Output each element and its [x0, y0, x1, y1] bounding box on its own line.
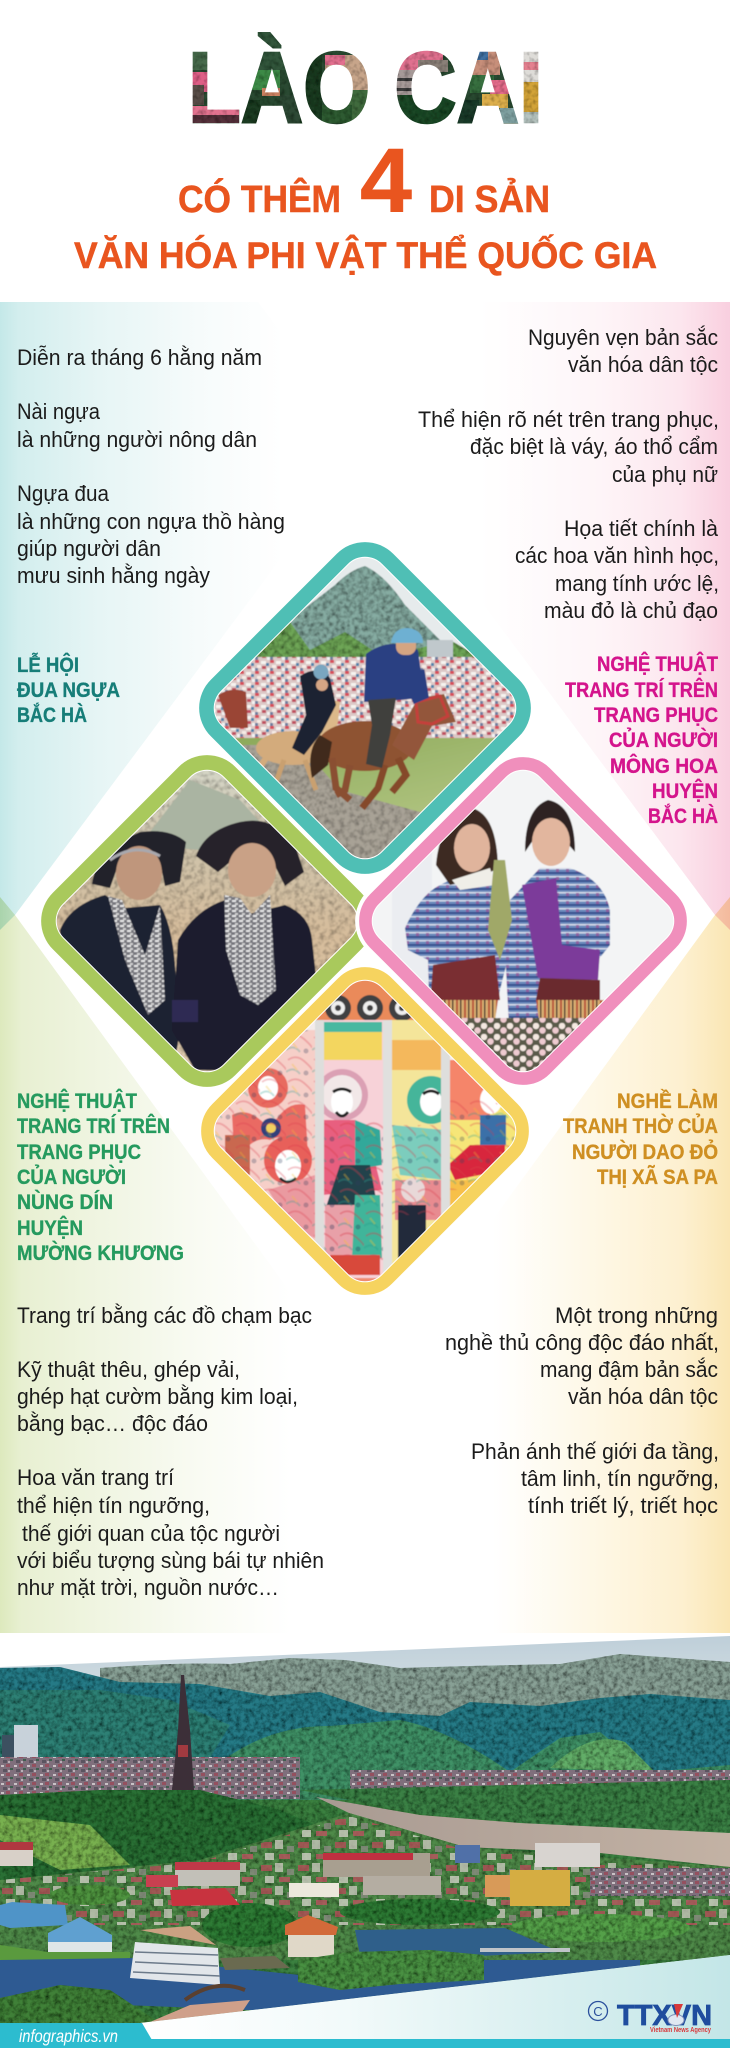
text block: horse race details: Diễn ra tháng 6 hằng năm — [17, 345, 262, 370]
subtitle: DI SẢN — [429, 177, 550, 221]
heading: Dao worship painting craft: NGHỀ LÀM — [617, 1090, 718, 1113]
bottom wedge — [140, 1955, 730, 2039]
river — [316, 1797, 730, 1867]
logo: TTXVN: C — [593, 2004, 603, 2019]
text block: horse race details: Nài ngựa — [17, 399, 101, 424]
heading: Dao worship painting craft: THỊ XÃ SA PA — [597, 1166, 718, 1189]
text block: Nung Din costume details: ghép hạt cườm bằng kim loại, — [17, 1384, 298, 1409]
bottom teal bar — [0, 2039, 730, 2048]
text block: Nung Din costume details: Hoa văn trang trí — [17, 1465, 174, 1490]
heading: Dao worship painting craft — [563, 1090, 718, 1189]
text block: Dao painting details: tính triết lý, triết học — [528, 1493, 718, 1518]
foot bridge — [185, 1986, 245, 2000]
subtitle: CÓ THÊM — [178, 177, 341, 221]
lower town base — [0, 1813, 730, 1960]
heading: Mong Hoa costume art: MÔNG HOA — [610, 754, 718, 778]
buildings — [0, 1850, 33, 1866]
text block: Mong Hoa costume details: Họa tiết chính là — [564, 516, 719, 541]
text block: horse race details: giúp người dân — [17, 536, 161, 561]
lawn — [0, 1945, 130, 1960]
left woman — [60, 894, 180, 1051]
heading: Nung Din costume art: TRANG PHỤC — [17, 1141, 141, 1164]
photo diamond: Mong Hoa women — [355, 757, 687, 1085]
photo diamond: horse race — [199, 542, 531, 874]
heading: Mong Hoa costume art: TRANG PHỤC — [594, 704, 718, 727]
big number 4: 4 — [360, 131, 412, 232]
text block: horse race details: là những con ngựa thồ hàng — [17, 509, 285, 534]
text block: Mong Hoa costume details: các hoa văn hình học, — [515, 543, 719, 568]
photo diamond: Dao worship paintings — [201, 967, 529, 1295]
text block: Nung Din costume details — [17, 1303, 324, 1600]
heading: Nung Din costume art: CỦA NGƯỜI — [17, 1165, 126, 1189]
island — [298, 1950, 484, 1990]
pavilion — [285, 1915, 338, 1935]
center-left scroll — [324, 1019, 384, 1278]
tree belts — [50, 1885, 690, 1947]
scattered rooftops — [0, 1816, 730, 1925]
heading: Nung Din costume art: HUYỆN — [17, 1216, 83, 1240]
logo: TTXVN: Vietnam News Agency — [650, 2027, 711, 2034]
text block: Nung Din costume details: Kỹ thuật thêu, ghép vải, — [17, 1357, 240, 1382]
heading: Mong Hoa costume art: CỦA NGƯỜI — [609, 728, 718, 752]
heading: Mong Hoa costume art: HUYỆN — [652, 779, 718, 803]
dark blue-green mountains — [0, 1667, 730, 1770]
right woman — [505, 868, 611, 1019]
left scroll — [215, 1030, 316, 1241]
text block: Dao painting details — [445, 1303, 719, 1518]
main rider — [364, 644, 422, 702]
text block: Dao painting details: văn hóa dân tộc — [568, 1384, 718, 1409]
blue roofs — [0, 1902, 68, 1928]
text block: Dao painting details: nghề thủ công độc đáo nhất, — [445, 1330, 719, 1355]
text block: horse race details: là những người nông dân — [17, 427, 257, 452]
logo: TTXVN: TTXVN — [617, 2000, 712, 2032]
heading: Nung Din costume art — [17, 1089, 184, 1265]
text block: Dao painting details: Một trong những — [555, 1303, 718, 1328]
far mountains — [100, 1654, 730, 1716]
subtitle: VĂN HÓA PHI VẬT THỂ QUỐC GIA — [74, 234, 657, 276]
left woman — [404, 880, 507, 994]
text block: Nung Din costume details: thế giới quan của tộc người — [22, 1521, 280, 1546]
text block: Mong Hoa costume details: màu đỏ là chủ đạo — [544, 598, 718, 623]
left horse — [218, 690, 248, 728]
center-right scroll — [392, 1019, 442, 1264]
left and right town strips — [0, 1757, 300, 1799]
white hotel — [130, 1942, 220, 1985]
heading: horse race festival: ĐUA NGỰA — [17, 679, 120, 702]
heading: Mong Hoa costume art: BẮC HÀ — [648, 804, 718, 828]
background quadrants — [0, 302, 730, 1633]
title: Lào Cai: LÀO CAI — [188, 32, 543, 144]
text block: Mong Hoa costume details: văn hóa dân tộc — [568, 352, 718, 377]
text block: horse race details: Ngựa đua — [17, 481, 110, 506]
TV tower — [172, 1675, 194, 1790]
main lake — [0, 1958, 640, 2012]
text block: Nung Din costume details: bằng bạc… độc đáo — [17, 1411, 208, 1436]
text block: Mong Hoa costume details: mang tính ước lệ, — [555, 571, 719, 596]
text block: Mong Hoa costume details: Thể hiện rõ nét trên trang phục, — [418, 407, 719, 432]
subtitle — [74, 131, 657, 276]
heading: Nung Din costume art: MƯỜNG KHƯƠNG — [17, 1241, 184, 1265]
right woman — [172, 900, 317, 1071]
text block: horse race details — [17, 345, 285, 588]
tall building — [14, 1725, 38, 1759]
heading: horse race festival — [17, 653, 120, 727]
photo diamond: Nung Din women — [41, 755, 364, 1087]
heading: Mong Hoa costume art — [565, 652, 718, 828]
text block: Nung Din costume details: như mặt trời, nguồn nước… — [17, 1575, 279, 1600]
foreground trees — [0, 1985, 156, 2023]
silver borders — [315, 1020, 324, 1280]
heading: Nung Din costume art: TRANG TRÍ TRÊN — [17, 1114, 170, 1138]
text block: Dao painting details: mang đậm bản sắc — [540, 1357, 718, 1382]
text block: Nung Din costume details: thể hiện tín ngưỡng, — [17, 1493, 210, 1518]
heading: Nung Din costume art: NÙNG DÍN — [17, 1190, 113, 1214]
source tab: infographics.vn: infographics.vn — [19, 2026, 118, 2046]
text block: Mong Hoa costume details — [418, 325, 719, 623]
text block: Mong Hoa costume details: của phụ nữ — [612, 462, 718, 487]
text block: Mong Hoa costume details: Nguyên vẹn bản sắc — [528, 325, 718, 350]
heading: horse race festival: BẮC HÀ — [17, 703, 87, 727]
main horse — [317, 721, 413, 771]
city photo: Lao Cai panorama — [0, 1630, 730, 2030]
text block: Dao painting details: Phản ánh thế giới đa tầng, — [471, 1439, 719, 1464]
flower sprig — [488, 860, 512, 960]
right scroll — [450, 1106, 516, 1181]
heading: Dao worship painting craft: NGƯỜI DAO ĐỎ — [572, 1140, 718, 1164]
text block: horse race details: mưu sinh hằng ngày — [17, 563, 210, 588]
text block: Mong Hoa costume details: đặc biệt là váy, áo thổ cẩm — [470, 434, 718, 459]
text block: Nung Din costume details: Trang trí bằng các đồ chạm bạc — [17, 1303, 312, 1328]
upper lake — [355, 1928, 559, 1956]
source tab: infographics.vn — [0, 2023, 152, 2048]
heading: horse race festival: LỄ HỘI — [17, 653, 79, 677]
second horse and rider — [256, 730, 316, 766]
text block: Dao painting details: tâm linh, tín ngưỡng, — [521, 1466, 719, 1491]
text block: Nung Din costume details: với biểu tượng sùng bái tự nhiên — [17, 1548, 324, 1573]
heading: Nung Din costume art: NGHỆ THUẬT — [17, 1089, 137, 1113]
